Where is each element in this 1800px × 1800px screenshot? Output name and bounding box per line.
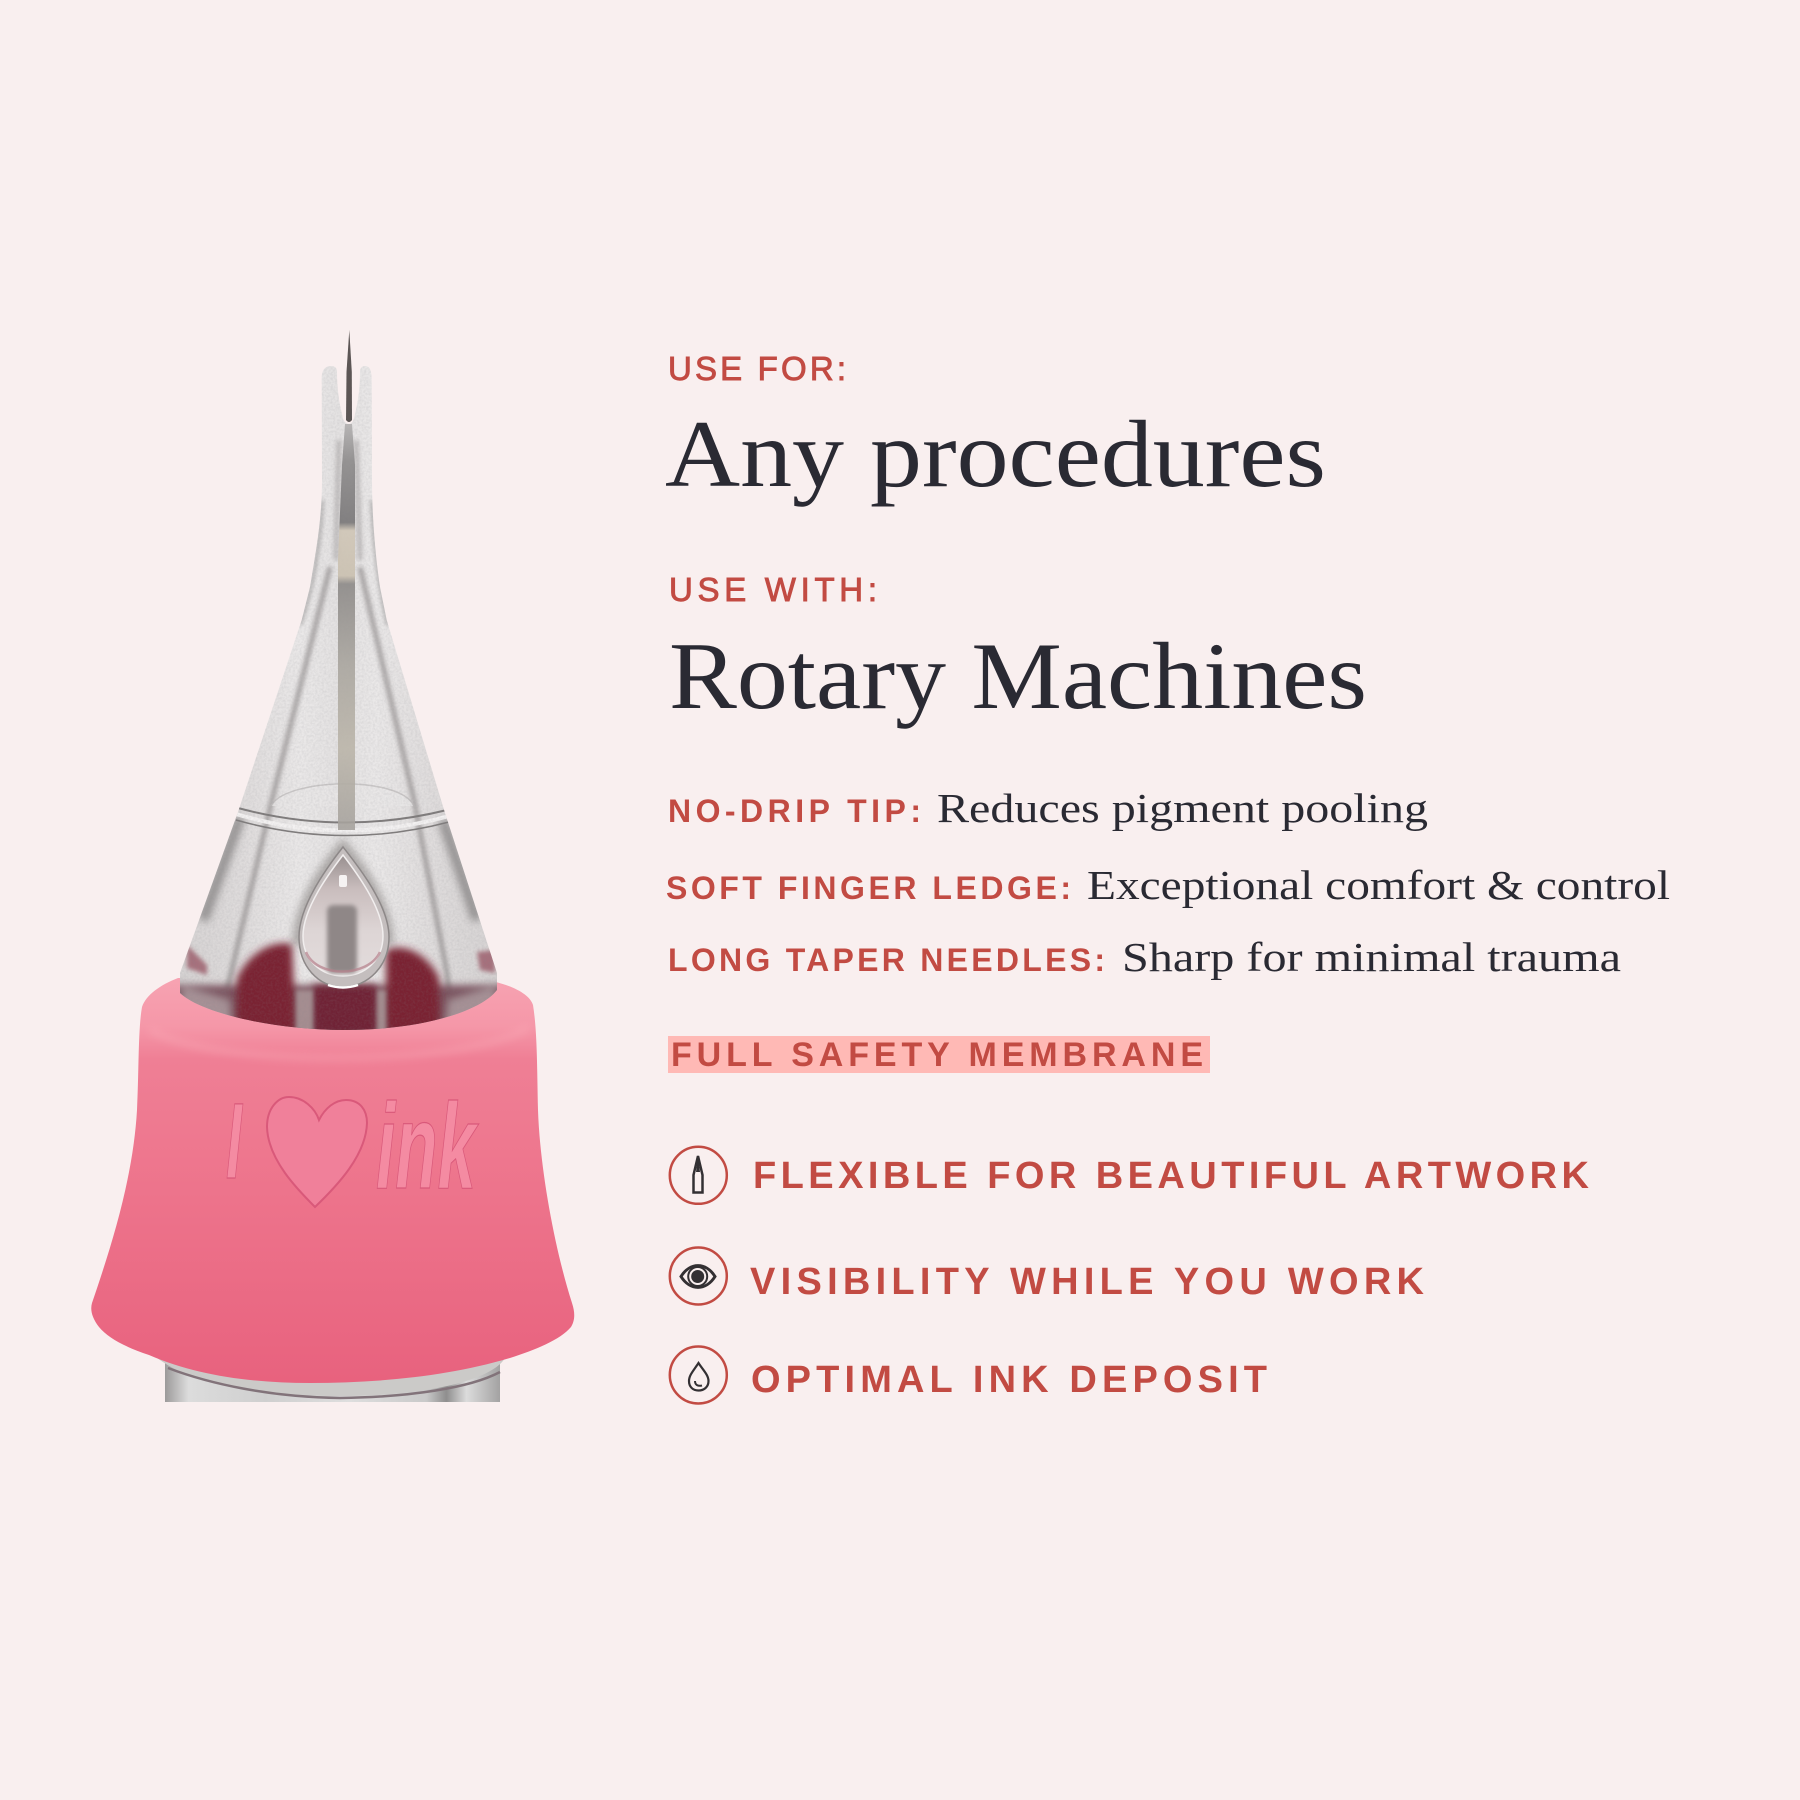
pink collar [91,978,574,1383]
benefit: ink deposit: OPTIMAL INK DEPOSIT [751,1359,1267,1401]
icon: ink drop [670,1346,727,1404]
plastic grain [170,360,510,1040]
feature: no-drip tip: Reduces pigment pooling [937,785,1428,831]
text block: use for [665,350,1326,507]
cartridge base [150,1345,506,1402]
feature: no-drip tip [668,785,1428,831]
feature: long taper needles: Sharp for minimal trauma [1122,934,1621,980]
feature: long taper needles [668,934,1621,980]
teardrop window [292,838,394,988]
benefit: visibility: VISIBILITY WHILE YOU WORK [750,1261,1425,1303]
text block: use with [669,571,1367,729]
label: use for: USE FOR: [668,350,846,387]
feature: no-drip tip: NO-DRIP TIP: [668,793,921,829]
neck edge shading [300,500,388,625]
ribs [227,567,330,990]
clear plastic cone [170,330,510,1040]
embossed logo on collar [226,1078,479,1214]
inner dome [271,784,414,806]
benefit: ink deposit [670,1346,1267,1404]
feature: soft finger ledge: SOFT FINGER LEDGE: [666,870,1071,906]
label: use with: USE WITH: [669,571,877,608]
icon: needle [670,1147,727,1204]
feature: long taper needles: LONG TAPER NEEDLES: [668,942,1105,978]
highlighted callout: full safety membrane: FULL SAFETY MEMBRANE [671,1036,1203,1074]
benefit: visibility [670,1248,1425,1304]
needle shaft [338,424,355,830]
red ink seen through plastic [180,979,497,1030]
feature: soft finger ledge: Exceptional comfort & control [1087,862,1670,908]
product photo: needle cartridge [91,330,574,1402]
benefit: flexible: FLEXIBLE FOR BEAUTIFUL ARTWORK [753,1155,1590,1197]
feature: soft finger ledge [666,862,1670,908]
icon: eye [670,1248,727,1304]
embossed I: I [226,1080,243,1201]
embossed ink: ink [376,1078,479,1214]
needle tip [346,330,352,422]
embossed heart [267,1097,367,1207]
heading: rotary machines: Rotary Machines [669,623,1367,729]
band lines [238,808,447,823]
benefit: flexible [670,1147,1590,1204]
heading: any procedures: Any procedures [665,401,1326,507]
side shadows under band [203,817,240,920]
